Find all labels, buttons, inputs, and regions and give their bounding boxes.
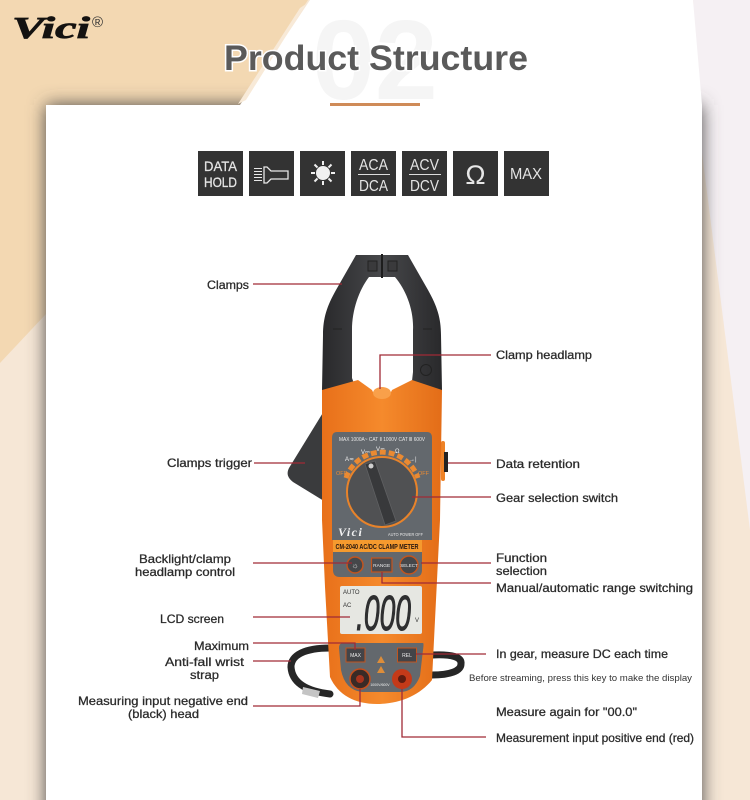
icon: ACA DCA bbox=[351, 151, 396, 196]
dial panel: OFF bbox=[418, 471, 430, 477]
backlight button: ☼ bbox=[351, 561, 359, 570]
rel button: REL bbox=[402, 653, 412, 659]
icon: ACV DCV bbox=[402, 151, 447, 196]
callout: function selection: Function bbox=[496, 551, 547, 565]
callout: function selection: selection bbox=[496, 564, 547, 578]
callout: range switching bbox=[382, 572, 693, 595]
callout: backlight control bbox=[135, 552, 352, 579]
white card bbox=[46, 105, 702, 800]
callout: maximum bbox=[194, 639, 355, 653]
callout: clamps: Clamps bbox=[207, 278, 249, 292]
icon: MAX: MAX bbox=[510, 166, 543, 183]
callout: negative input: Measuring input negative end bbox=[78, 694, 248, 708]
icon: ACV DCV: DCV bbox=[410, 178, 440, 195]
callout: LCD screen: LCD screen bbox=[160, 612, 224, 626]
dial panel: Ω bbox=[395, 449, 400, 455]
LCD display: V bbox=[415, 618, 419, 624]
dial panel: OFF bbox=[336, 471, 348, 477]
dial panel: V⎓ bbox=[361, 450, 370, 456]
LCD display: AUTO bbox=[343, 590, 360, 596]
select button: SELECT bbox=[400, 563, 418, 568]
dial panel: MAX 1000A~ CAT Ⅱ 1000V CAT Ⅲ 600V bbox=[339, 437, 426, 443]
icon: data hold: DATA bbox=[204, 158, 238, 174]
negative jack bbox=[350, 669, 370, 689]
callout: range switching: Manual/automatic range switching bbox=[496, 581, 693, 595]
callout: maximum: Maximum bbox=[194, 639, 249, 653]
callout: wrist strap bbox=[165, 655, 291, 682]
LCD display: .000 bbox=[356, 587, 411, 641]
callout: wrist strap: strap bbox=[190, 668, 219, 682]
callout: clamps bbox=[207, 278, 342, 292]
dial panel: Vici bbox=[338, 525, 363, 539]
clamp meter illustration bbox=[288, 254, 461, 704]
gear selection dial bbox=[346, 452, 418, 527]
warning triangles bbox=[377, 656, 385, 673]
dial panel: →| bbox=[409, 457, 417, 463]
callout: positive input bbox=[402, 689, 694, 745]
logo: Vici bbox=[12, 10, 91, 45]
title underline bbox=[330, 103, 420, 106]
callout: negative input bbox=[78, 689, 360, 721]
callout: data retention bbox=[448, 457, 580, 471]
icon: MAX bbox=[504, 151, 549, 196]
title: Product Structure bbox=[224, 38, 528, 78]
note: before streaming: Before streaming, press this key to make the display bbox=[469, 673, 692, 684]
clamps bbox=[322, 254, 442, 392]
wrist strap bbox=[291, 648, 461, 698]
max button: MAX bbox=[350, 653, 362, 659]
callout: gear selection switch: Gear selection switch bbox=[496, 491, 618, 505]
callout: clamps trigger: Clamps trigger bbox=[167, 456, 252, 470]
data retention button bbox=[441, 441, 448, 481]
model strip bbox=[333, 540, 422, 552]
button panel bbox=[333, 552, 422, 577]
positive jack bbox=[392, 669, 412, 689]
dial panel: AUTO POWER OFF bbox=[388, 532, 423, 537]
callout: clamp headlamp bbox=[380, 348, 592, 389]
range button: RANGE bbox=[373, 563, 390, 569]
callout: wrist strap: Anti-fall wrist bbox=[165, 655, 245, 669]
clamps trigger bbox=[288, 411, 324, 501]
dial panel: A≂ bbox=[345, 457, 354, 463]
model strip: CM-2040 AC/DC CLAMP METER bbox=[336, 544, 418, 551]
note: measure again: Measure again for "00.0" bbox=[496, 705, 637, 719]
icon: ACV DCV: ACV bbox=[410, 157, 440, 174]
callout: negative input: (black) head bbox=[128, 707, 199, 721]
lower control panel bbox=[339, 643, 424, 692]
icon: ACA DCA: DCA bbox=[359, 178, 389, 195]
dial panel: V≂ bbox=[376, 447, 385, 453]
icon: ohm bbox=[453, 151, 498, 196]
callout: DC measurement: In gear, measure DC each time bbox=[496, 647, 668, 661]
icon: ACA DCA: ACA bbox=[359, 157, 389, 174]
icon: data hold bbox=[198, 151, 243, 196]
logo bbox=[12, 10, 103, 45]
ghost number 02: 02 bbox=[312, 0, 438, 123]
callout: data retention: Data retention bbox=[496, 457, 580, 471]
dial panel bbox=[332, 432, 432, 540]
icon: brightness bbox=[300, 151, 345, 196]
callout: positive input: Measurement input positive end (red) bbox=[496, 731, 694, 745]
callout: clamp headlamp: Clamp headlamp bbox=[496, 348, 592, 362]
icon: data hold: HOLD bbox=[204, 174, 237, 190]
icon: ohm: Ω bbox=[465, 160, 486, 190]
orange body bbox=[322, 380, 442, 704]
callout: backlight control: Backlight/clamp bbox=[139, 552, 231, 566]
clamp headlamp bbox=[373, 387, 391, 399]
callout: clamps trigger bbox=[167, 456, 305, 470]
LCD display bbox=[340, 586, 422, 641]
logo: ® bbox=[92, 14, 103, 31]
callout: function selection bbox=[421, 551, 547, 578]
icon: flashlight bbox=[249, 151, 294, 196]
lower control panel: 1000V/600V bbox=[370, 683, 390, 687]
LCD display: AC bbox=[343, 603, 352, 609]
feature icons bbox=[198, 151, 549, 196]
callout: backlight control: headlamp control bbox=[135, 565, 235, 579]
